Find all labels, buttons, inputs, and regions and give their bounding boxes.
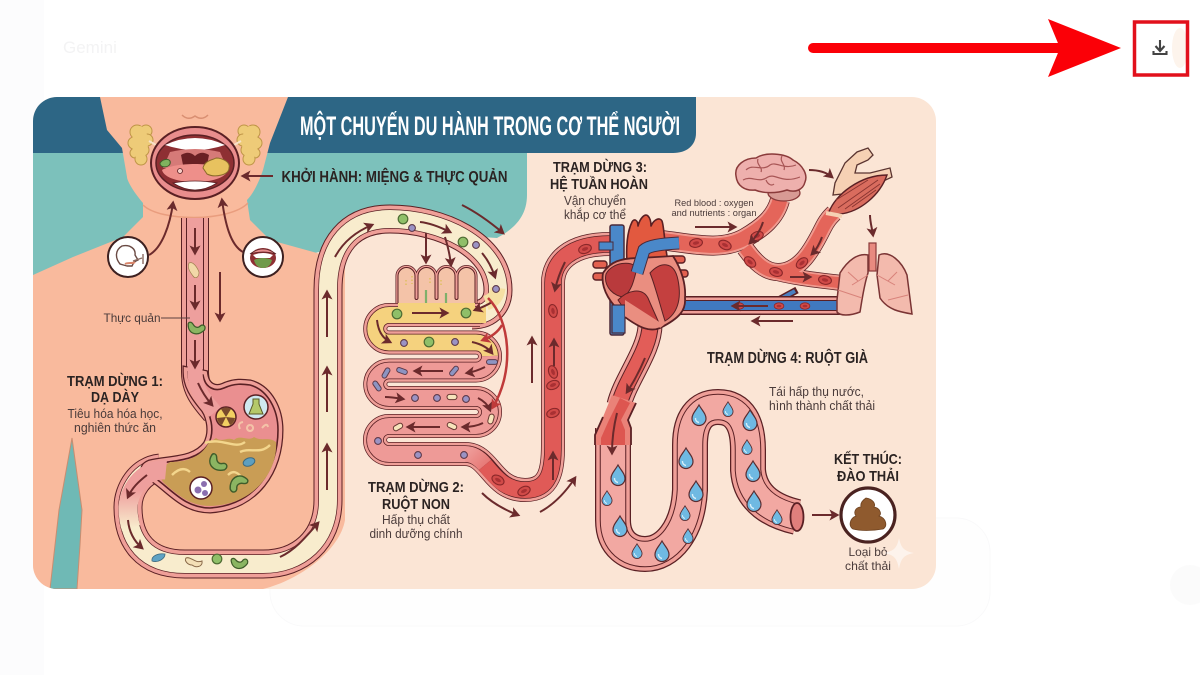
heading: stop 4: TRẠM DỪNG 4: RUỘT GIÀ — [707, 349, 868, 367]
background: blurred app screen: Gemini — [63, 38, 117, 57]
background: teal area — [33, 153, 527, 275]
oesophagus — [195, 218, 215, 412]
text block: stop 1: DẠ DÀY — [91, 389, 139, 406]
text block: stop 2: dinh dưỡng chính — [370, 527, 463, 541]
label: start: KHỞI HÀNH: MIỆNG & THỰC QUẢN — [282, 167, 508, 186]
text block: stop 2: RUỘT NON — [382, 495, 450, 513]
pulmonary artery — [637, 243, 679, 273]
icon: sparkle — [884, 538, 914, 569]
text block: stop 3: khắp cơ thể — [564, 207, 626, 222]
water drops — [602, 402, 782, 562]
text block: stop 1: nghiên thức ăn — [74, 421, 156, 435]
text block: end: chất thải — [845, 559, 891, 573]
icon: flask — [244, 395, 268, 419]
body skin — [33, 97, 345, 589]
chin line — [143, 203, 248, 218]
arrow: red absorption lines — [483, 298, 507, 407]
text block: end — [834, 450, 902, 573]
text: stop 4 description: hình thành chất thải — [769, 399, 875, 413]
text block: stop 2: Hấp thụ chất — [382, 513, 450, 527]
text: blood note — [672, 198, 756, 219]
text block: stop 3: Vận chuyển — [564, 194, 626, 208]
text block: stop 1 — [67, 372, 163, 435]
icon: molecule — [190, 477, 212, 499]
panel: infographic — [33, 97, 936, 589]
text block: stop 3: TRẠM DỪNG 3: — [553, 158, 647, 176]
small intestine: villi — [396, 265, 478, 303]
particles in the intestine — [152, 214, 593, 572]
text block: end: KẾT THÚC: — [834, 450, 902, 468]
icon: lungs — [837, 243, 912, 315]
small intestine: serpentine and blood vessel — [375, 244, 610, 490]
icon: poop circle — [841, 488, 895, 542]
text block: stop 1: TRẠM DỪNG 1: — [67, 372, 163, 390]
text: stop 4 description: Tái hấp thụ nước, — [769, 385, 864, 399]
icon: breath circle — [108, 237, 148, 277]
heart — [593, 215, 688, 335]
icon: radiation — [216, 407, 236, 427]
icon: mouth — [151, 127, 239, 199]
text block: stop 3: HỆ TUẦN HOÀN — [550, 175, 648, 193]
icon: download — [1154, 40, 1166, 54]
icon: brain — [736, 154, 806, 201]
header band — [33, 97, 696, 153]
text: stop 4 description — [769, 385, 875, 413]
text block: stop 1: Tiêu hóa hóa học, — [68, 407, 162, 421]
text block: stop 3 — [550, 158, 648, 222]
stomach — [128, 345, 278, 528]
icon: arm muscle — [826, 148, 892, 216]
text block: end: Loại bỏ — [848, 545, 888, 559]
large intestine — [595, 395, 804, 562]
arrows — [128, 170, 873, 557]
vessel stubs — [593, 256, 688, 280]
end of tube — [790, 503, 804, 531]
descending vessel — [619, 325, 650, 405]
heart body — [603, 256, 685, 330]
highlight box with download icon — [1134, 22, 1188, 75]
heart chambers — [606, 263, 637, 297]
aorta — [627, 215, 668, 262]
background: teal sliver — [50, 438, 82, 589]
text block: end: ĐÀO THẢI — [837, 468, 899, 485]
text: blood note: and nutrients : organ — [672, 208, 756, 219]
title: MỘT CHUYẾN DU HÀNH TRONG CƠ THỂ NGƯỜI — [300, 110, 680, 141]
text block: stop 2: TRẠM DỪNG 2: — [368, 478, 464, 496]
arteries to organs — [660, 200, 842, 285]
vena cava — [599, 225, 624, 335]
arrow: big red pointer — [813, 19, 1121, 77]
nose — [182, 115, 208, 118]
vein — [680, 290, 840, 315]
icon: chewing mouth circle — [243, 237, 283, 277]
long intestine tube — [128, 219, 498, 564]
label: oesophagus: Thực quản — [104, 311, 160, 325]
icon: salivary glands — [128, 125, 262, 165]
text: blood note: Red blood : oxygen — [674, 198, 754, 209]
text block: stop 2 — [368, 478, 464, 541]
